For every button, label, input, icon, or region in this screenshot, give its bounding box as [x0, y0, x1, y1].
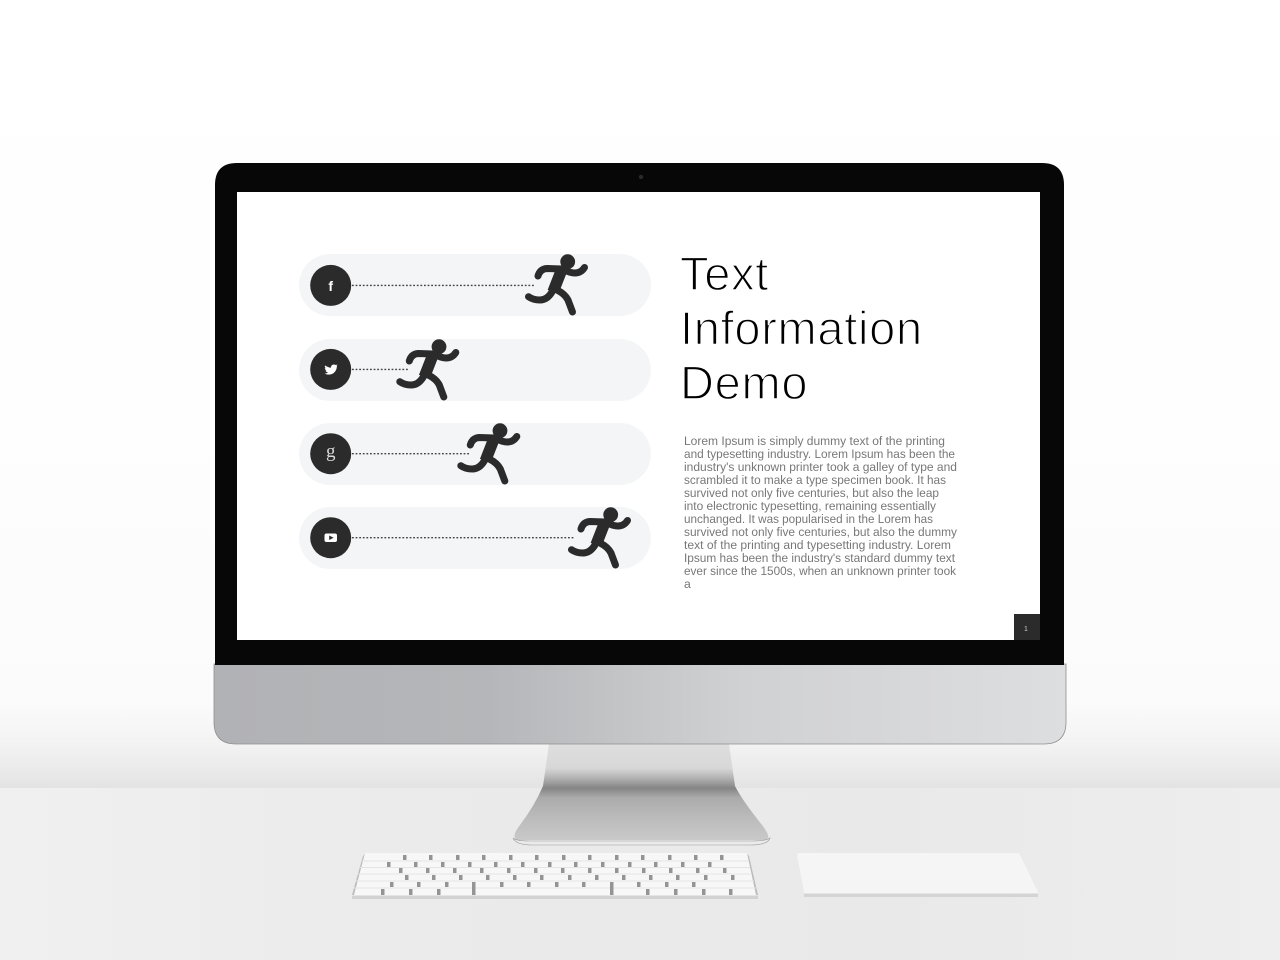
- monitor: [214, 163, 1066, 744]
- page number badge: [1014, 614, 1040, 640]
- monitor bezel: [215, 163, 1064, 665]
- monitor stand: [513, 744, 770, 845]
- row: youtube: [299, 507, 651, 569]
- title: [680, 247, 923, 409]
- keyboard: [352, 853, 758, 899]
- body text: unchanged. It was popularised in the Lorem has: [684, 512, 933, 526]
- body text: industry's unknown printer took a galley of type and: [684, 460, 957, 474]
- webcam: [639, 175, 643, 179]
- row: twitter: [299, 339, 651, 401]
- body text: scrambled it to make a type specimen book. It has: [684, 473, 946, 487]
- body text: Ipsum has been the industry's standard dummy text: [684, 551, 956, 565]
- body text: and typesetting industry. Lorem Ipsum has been the: [684, 447, 955, 461]
- body text: into electronic typesetting, remaining essentially: [684, 499, 937, 513]
- title: Text: [680, 247, 769, 300]
- screen: [237, 192, 1040, 640]
- body text: survived not only five centuries, but also the leap: [684, 486, 939, 500]
- monitor chin: [214, 664, 1066, 744]
- body text: Lorem Ipsum is simply dummy text of the printing: [684, 434, 945, 448]
- body text: survived not only five centuries, but also the dummy: [684, 525, 958, 539]
- panel: running progress rows: [299, 254, 651, 569]
- row: google: g: [326, 441, 336, 462]
- title: Information: [680, 302, 923, 354]
- page number badge: 1: [1024, 626, 1028, 633]
- trackpad: [797, 853, 1038, 897]
- body text: ever since the 1500s, when an unknown printer took: [684, 564, 957, 578]
- body text: a: [684, 577, 691, 591]
- row: facebook: [299, 254, 651, 316]
- row: google: [299, 423, 651, 485]
- body text: text of the printing and typesetting industry. Lorem: [684, 538, 951, 552]
- desk surface: [0, 788, 1280, 960]
- title: Demo: [680, 356, 808, 409]
- body text: [684, 434, 958, 591]
- row: facebook: f: [328, 278, 333, 294]
